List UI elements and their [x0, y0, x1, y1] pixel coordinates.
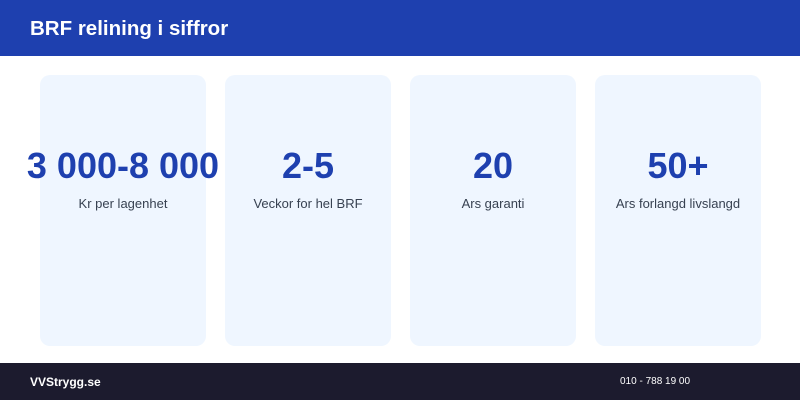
stat label: Kr per lagenhet: [79, 196, 167, 211]
stat number: 20: [473, 145, 513, 186]
stat label: Ars garanti: [462, 196, 524, 211]
stat number: 2-5: [282, 145, 334, 186]
phone: 010 - 788 19 00: [620, 376, 690, 387]
card: lifespan: [595, 75, 761, 346]
card: warranty: [410, 75, 576, 346]
header: [0, 0, 800, 56]
stat label: Veckor for hel BRF: [253, 196, 363, 211]
card: cost: [40, 75, 206, 346]
stat number: 50+: [647, 145, 709, 186]
title: BRF relining i siffror: [30, 17, 228, 40]
card: weeks: [225, 75, 391, 346]
stat label: Ars forlangd livslangd: [616, 196, 740, 211]
footer: [0, 363, 800, 400]
stat number: 3 000-8 000: [27, 145, 219, 186]
brand: VVStrygg.se: [30, 375, 101, 389]
